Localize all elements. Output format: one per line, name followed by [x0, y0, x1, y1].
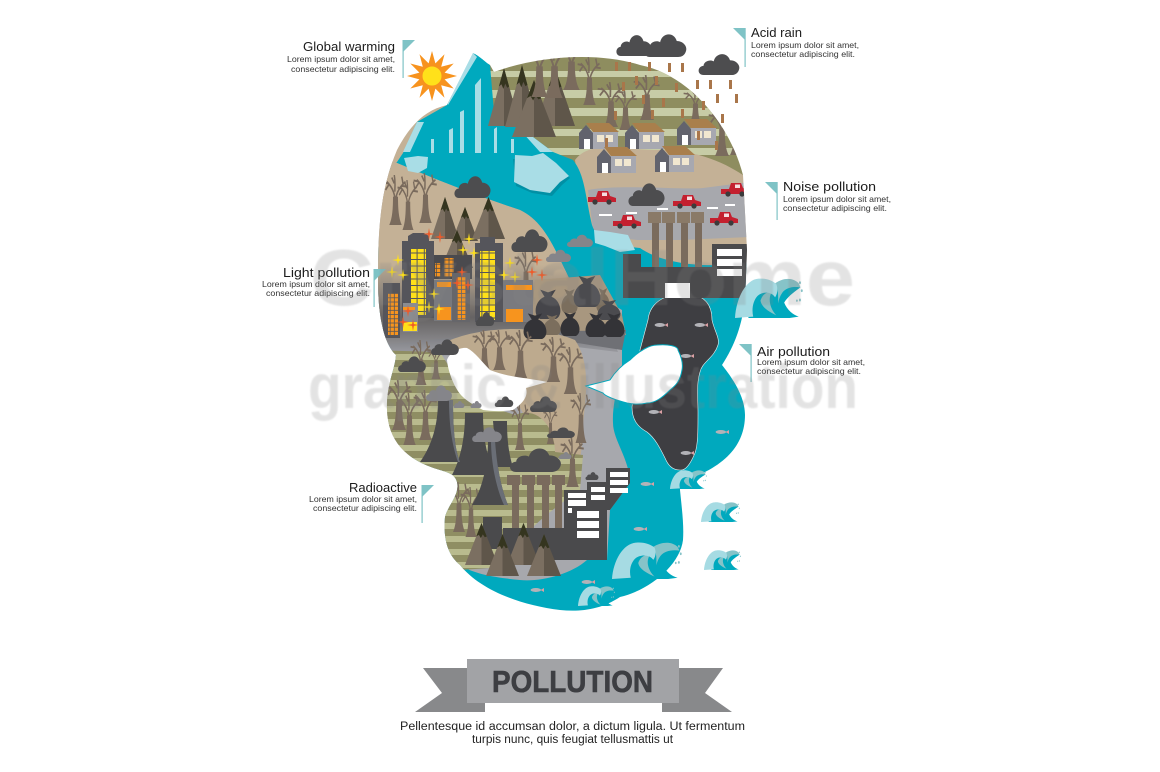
callout: air pollution: consectetur adipiscing elit. — [757, 366, 861, 376]
factory lower — [483, 468, 630, 560]
city buildings — [383, 233, 533, 338]
callout: acid rain: Lorem ipsum dolor sit amet, — [751, 40, 859, 50]
left land grey base — [370, 150, 630, 580]
callout: air pollution: Air pollution — [757, 345, 830, 359]
trees lower — [386, 330, 591, 537]
callout: air pollution: Lorem ipsum dolor sit amet, — [757, 357, 865, 367]
callout: light pollution: Light pollution — [283, 266, 370, 280]
callout: radioactive: Lorem ipsum dolor sit amet, — [309, 494, 417, 504]
subtitle text — [400, 721, 745, 746]
callout: radioactive: Radioactive — [349, 481, 417, 495]
infographic canvas — [262, 28, 890, 746]
tan forest clearing — [440, 329, 586, 458]
olive striped hills — [488, 57, 743, 175]
skull land and water layers — [370, 40, 753, 620]
ice chunks — [404, 137, 635, 252]
cooling towers — [420, 400, 513, 505]
eye socket right — [586, 345, 682, 404]
mountains middle — [431, 197, 505, 268]
olive striped fields lower left — [370, 350, 583, 570]
fish — [531, 323, 729, 592]
callout: acid rain: Acid rain — [751, 26, 802, 40]
light sparkles — [386, 228, 548, 331]
callout: global warming: Lorem ipsum dolor sit amet, — [287, 54, 395, 64]
tan land — [575, 148, 750, 270]
callout: light pollution: consectetur adipiscing elit. — [266, 288, 370, 298]
grey shadow under garbage — [558, 330, 626, 350]
waves — [578, 279, 803, 606]
road dashes — [599, 204, 735, 216]
panel: skull illustration — [370, 40, 753, 620]
callout: noise pollution: Lorem ipsum dolor sit amet, — [783, 194, 891, 204]
grey highway — [588, 182, 750, 240]
oil spill — [632, 294, 718, 470]
callout: noise pollution: Noise pollution — [783, 180, 876, 194]
subtitle text: turpis nunc, quis feugiat tellusmattis ut — [472, 734, 674, 746]
icon: sun — [407, 51, 457, 101]
ground under garbage — [530, 275, 626, 335]
glacier highlights — [403, 53, 514, 153]
factory upper right — [623, 212, 748, 298]
mountains lower — [465, 523, 561, 576]
clouds — [398, 34, 739, 480]
callout: global warming: consectetur adipiscing elit. — [291, 64, 395, 74]
houses — [579, 119, 717, 173]
subtitle text: Pellentesque id accumsan dolor, a dictum ligula. Ut fermentum — [400, 721, 745, 733]
tan slope behind glacier — [382, 95, 452, 200]
callout: noise pollution: consectetur adipiscing elit. — [783, 203, 887, 213]
callout: radioactive: consectetur adipiscing elit. — [313, 503, 417, 513]
title banner — [415, 659, 732, 712]
city smog — [378, 270, 618, 357]
callout: global warming — [287, 40, 415, 78]
callout: light pollution — [262, 266, 386, 307]
callout: noise pollution — [765, 180, 891, 220]
eye socket left — [447, 348, 547, 411]
callout: radioactive — [309, 481, 434, 523]
callout: acid rain — [733, 26, 859, 67]
watermark: CrystalHome — [310, 233, 855, 322]
title banner: POLLUTION — [492, 664, 653, 699]
trees upper — [531, 57, 736, 156]
watermark: graphic & illustration — [308, 353, 858, 422]
trees left — [385, 173, 536, 280]
teal sea and glacier — [370, 53, 752, 620]
callout: air pollution — [739, 344, 865, 382]
callout: light pollution: Lorem ipsum dolor sit amet, — [262, 279, 370, 289]
left tan land — [378, 161, 569, 344]
cars — [588, 183, 749, 229]
garbage bags — [524, 276, 624, 339]
callout: global warming: Global warming — [303, 40, 395, 54]
callout: acid rain: consectetur adipiscing elit. — [751, 49, 855, 59]
watermark — [308, 233, 858, 422]
acid rain drops — [605, 62, 738, 150]
mountains upper — [488, 65, 575, 137]
